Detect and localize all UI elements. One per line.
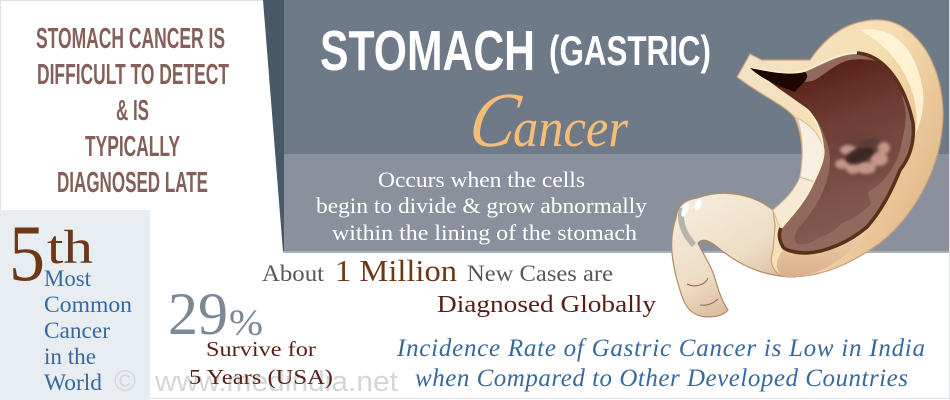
text: description: Occurs when the cells <box>378 167 585 192</box>
stat: 29%: % <box>229 303 263 344</box>
text: difficult to detect: STOMACH CANCER IS <box>36 23 225 55</box>
tumour <box>835 135 890 177</box>
text: incidence <box>396 335 925 392</box>
panel: header <box>263 0 949 253</box>
title: (GASTRIC) <box>549 27 711 74</box>
title: STOMACH <box>320 19 535 83</box>
text: difficult to detect: TYPICALLY <box>85 131 180 163</box>
dark rim <box>779 53 913 253</box>
text: most common cancer: Cancer <box>44 318 110 343</box>
text: 1 million: New Cases are <box>467 261 613 286</box>
stat: 29%: 5 Years (USA) <box>189 365 333 389</box>
text: most common cancer: in the <box>44 344 96 369</box>
watermark: www.medindia.net <box>154 366 398 398</box>
title: cancer: C <box>462 78 528 164</box>
text: description <box>316 167 647 245</box>
lower band <box>777 228 868 277</box>
duodenum <box>672 193 800 317</box>
text: difficult to detect: DIFFICULT TO DETECT <box>37 59 229 91</box>
inner lining <box>765 59 906 244</box>
stomach wall <box>737 20 943 277</box>
text: difficult to detect: & IS <box>116 95 149 127</box>
text: difficult to detect <box>36 23 229 199</box>
inner cavity <box>750 53 913 253</box>
text: 5th: 5 <box>9 210 45 298</box>
stat: 29%: 29 <box>168 281 228 347</box>
text: description: begin to divide & grow abnormally <box>316 193 647 218</box>
text: 5th: th <box>47 221 93 274</box>
highlight <box>860 29 923 135</box>
text: 5th <box>9 210 93 298</box>
text: 1 million: Diagnosed Globally <box>437 292 656 318</box>
text: 1 million: About <box>262 261 325 286</box>
text: incidence: when Compared to Other Developed Countries <box>415 365 908 392</box>
text: most common cancer: Most <box>44 266 92 291</box>
text: difficult to detect: DIAGNOSED LATE <box>57 167 208 199</box>
text: 1 million <box>262 253 656 318</box>
text: most common cancer: World <box>44 370 103 395</box>
text: most common cancer <box>44 266 133 395</box>
title: cancer: ancer <box>513 98 629 158</box>
text: most common cancer: Common <box>44 292 133 317</box>
panel: 5th most common <box>0 210 150 400</box>
title: cancer <box>462 78 629 164</box>
stat: 29% <box>168 281 333 389</box>
text: incidence: Incidence Rate of Gastric Cancer is Low in India <box>396 335 925 362</box>
text: 1 million: 1 Million <box>335 253 458 288</box>
esophagus opening <box>750 68 807 92</box>
text: description: within the lining of the stomach <box>332 220 637 245</box>
stat: 29%: Survive for <box>206 337 316 361</box>
watermark: © <box>114 365 136 398</box>
lesser curve bands <box>797 118 823 183</box>
icon: stomach <box>672 20 943 317</box>
